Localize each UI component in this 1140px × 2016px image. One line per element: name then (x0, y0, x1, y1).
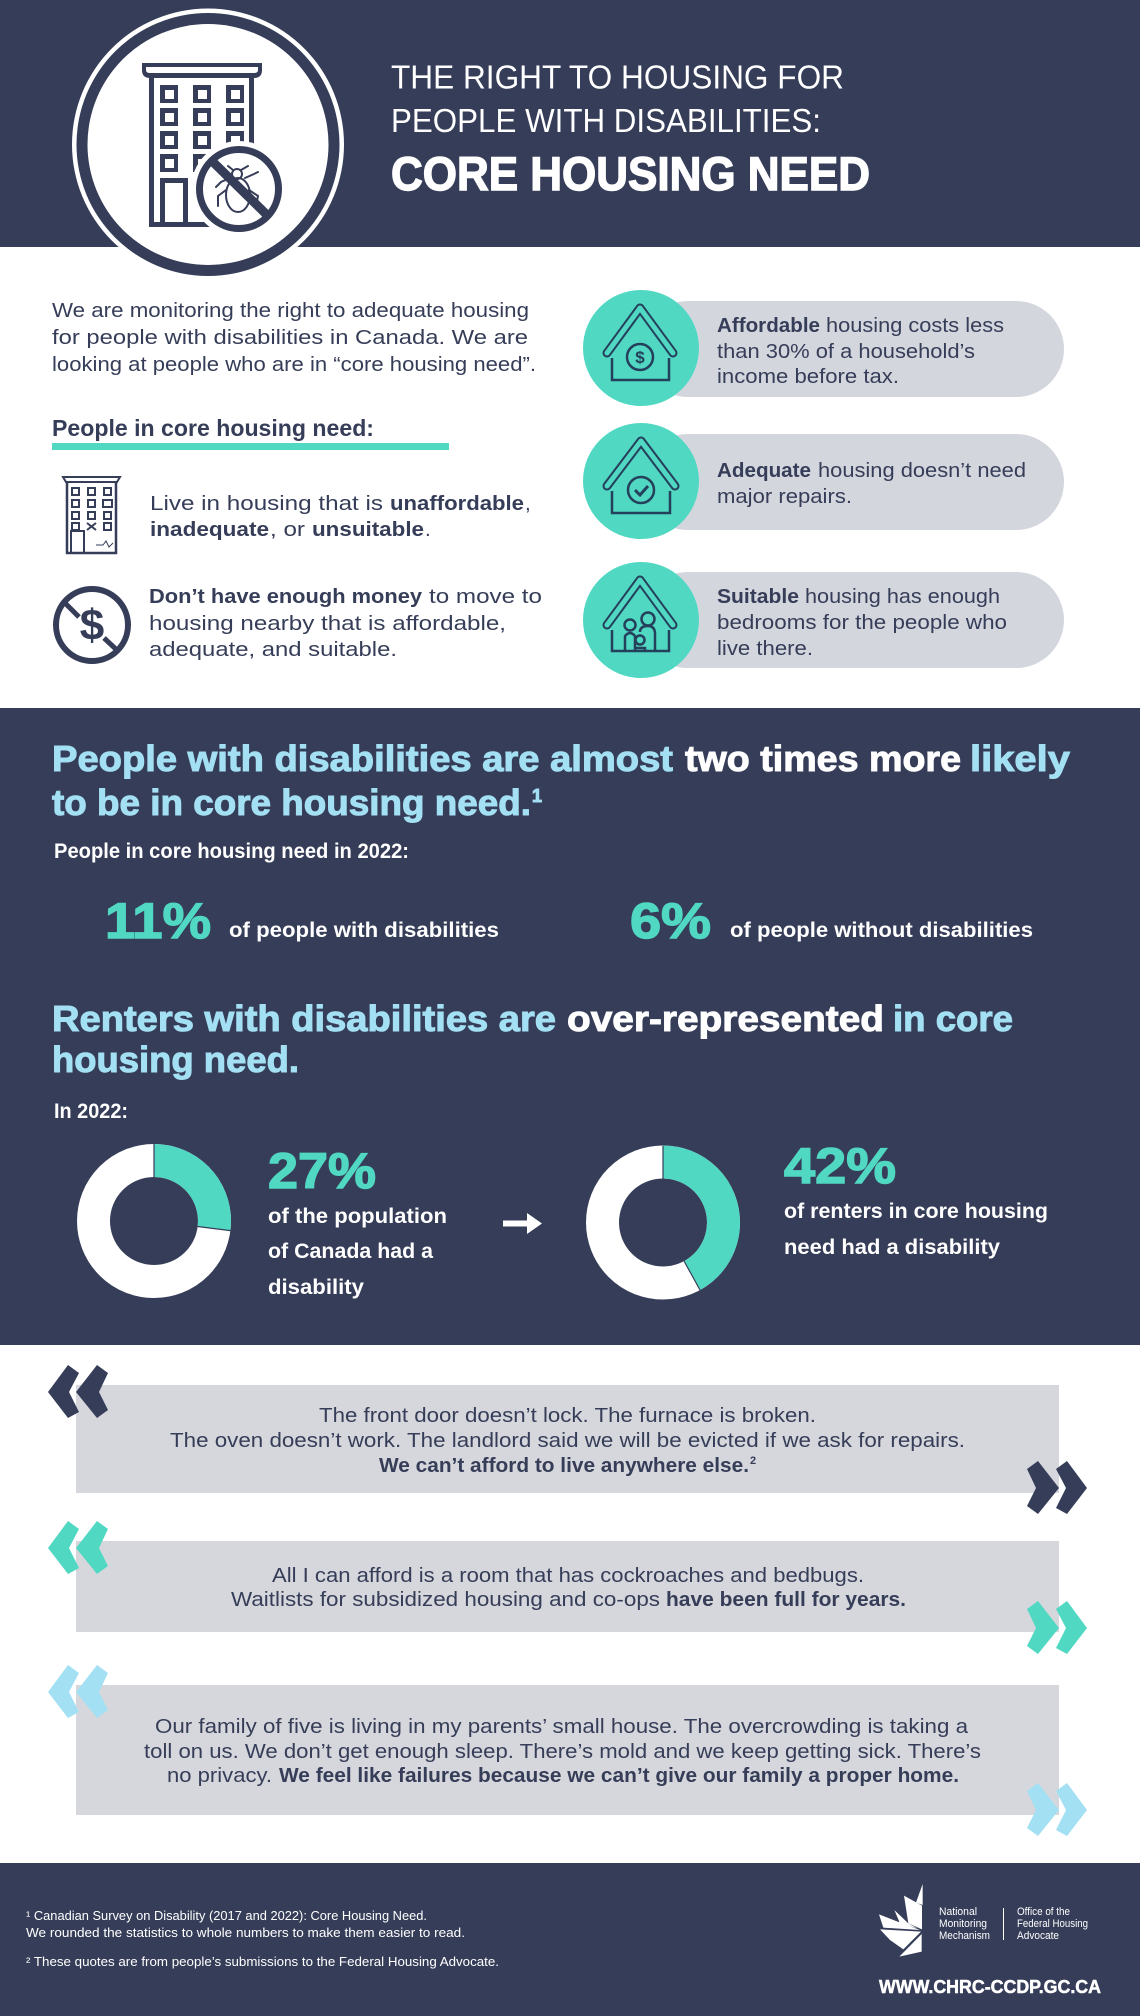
stat: 42 percent of renters: 42% (784, 1138, 896, 1194)
logo text: national monitoring mechanism (939, 1906, 990, 1942)
arrow (503, 1213, 542, 1234)
text: not enough money: housing nearby that is affordable, (149, 612, 506, 635)
logo text: national monitoring mechanism: Monitoring (939, 1918, 987, 1930)
text: suitable definition: live there. (717, 637, 813, 660)
logo text: office of the federal housing advocate (1017, 1906, 1088, 1942)
title: PEOPLE WITH DISABILITIES: (391, 102, 821, 139)
quote text (231, 1564, 906, 1611)
heading: two times more likely: two times more (685, 738, 961, 779)
icon: no money: $ (80, 601, 104, 650)
stat: 27 percent of population: of Canada had a (268, 1239, 434, 1263)
text: live in housing: . (425, 518, 431, 541)
text: not enough money (149, 585, 542, 661)
logo text: office of the federal housing advocate: Office of the (1017, 1906, 1070, 1918)
stat: 27 percent of population: of the population (268, 1204, 447, 1228)
quote text (144, 1715, 981, 1787)
text: live in housing: , (525, 492, 531, 515)
title: CORE HOUSING NEED (391, 147, 870, 200)
footnotes (26, 1909, 499, 1969)
text block: introduction: looking at people who are in “core housing need”. (52, 353, 536, 376)
stat: 11 percent: of people with disabilities (229, 918, 499, 942)
quote text: The front door doesn’t lock. The furnace is broken. (319, 1404, 816, 1427)
text: suitable definition: Suitable (717, 585, 799, 608)
icon: building with no-bugs badge (72, 8, 344, 280)
stat: 6 percent: 6% (630, 893, 711, 949)
icon: house with family (607, 580, 673, 651)
subheading: in 2022: In 2022: (54, 1099, 128, 1123)
text: affordable definition (717, 314, 1004, 388)
heading: people in core housing need: People in core housing need: (52, 415, 374, 441)
text: affordable definition: than 30% of a household’s (717, 340, 975, 363)
panel: quote three (48, 1665, 1087, 1836)
website url: WWW.CHRC-CCDP.GC.CA (879, 1977, 1101, 1997)
text: suitable definition: bedrooms for the people who (717, 611, 1007, 634)
text: live in housing: Live in housing that is (150, 492, 383, 515)
logo text: national monitoring mechanism: National (939, 1906, 977, 1918)
text: adequate definition: Adequate (717, 459, 811, 482)
footnotes: We rounded the statistics to whole numbers to make them easier to read. (26, 1926, 465, 1940)
text: affordable definition: Affordable (717, 314, 820, 337)
heading: two times more likely (52, 738, 1070, 823)
text: suitable definition (717, 585, 1007, 660)
heading: two times more likely: People with disabilities are almost (52, 738, 673, 779)
panel: affordable (583, 290, 1064, 406)
stat: 27 percent of population (268, 1143, 447, 1299)
quote text: Waitlists for subsidized housing and co-ops (231, 1588, 660, 1611)
stat: 6 percent (630, 893, 1033, 949)
text block: introduction (52, 299, 536, 376)
text: not enough money: to move to (429, 585, 542, 608)
text: not enough money: adequate, and suitable. (149, 638, 397, 661)
title (391, 58, 870, 200)
icon: closing quote mark (1027, 1601, 1087, 1654)
donut chart: 42 percent (602, 1146, 724, 1290)
text: affordable definition: income before tax. (717, 365, 899, 388)
panel: header (0, 0, 1140, 280)
panel: adequate (583, 423, 1064, 539)
quote text: All I can afford is a room that has cockroaches and bedbugs. (272, 1564, 864, 1587)
quote text: We feel like failures because we can’t give our family a proper home. (279, 1764, 959, 1787)
quote text: We can’t afford to live anywhere else. (379, 1454, 749, 1477)
stat: 6 percent: of people without disabilities (730, 918, 1033, 942)
footnotes: ¹ Canadian Survey on Disability (2017 and 2022): Core Housing Need. (26, 1909, 427, 1923)
icon: house with check (607, 441, 675, 513)
stat: 42 percent of renters: need had a disability (784, 1235, 1000, 1259)
heading: renters over-represented: Renters with disabilities are (52, 998, 556, 1039)
stat: 42 percent of renters (784, 1138, 1048, 1259)
text: suitable definition: housing has enough (805, 585, 1000, 608)
icon: closing quote mark (1027, 1461, 1087, 1514)
stat: 11 percent (105, 893, 499, 949)
subheading: 2022: People in core housing need in 2022: (54, 839, 409, 863)
text: live in housing: inadequate (150, 518, 269, 541)
heading: renters over-represented: in core (893, 998, 1013, 1039)
heading: renters over-represented: over-represented (567, 998, 884, 1039)
footnotes: ² These quotes are from people’s submissions to the Federal Housing Advocate. (26, 1955, 499, 1969)
text: live in housing: unaffordable (390, 492, 524, 515)
quote text: have been full for years. (666, 1588, 906, 1611)
heading: renters over-represented (52, 998, 1013, 1080)
icon: house with dollar (607, 308, 673, 380)
logo text: office of the federal housing advocate: Advocate (1017, 1930, 1059, 1942)
text: affordable definition: housing costs less (826, 314, 1004, 337)
quote text: Our family of five is living in my parents’ small house. The overcrowding is taking a (155, 1715, 969, 1738)
quote text: toll on us. We don’t get enough sleep. There’s mold and we keep getting sick. There’s (144, 1740, 981, 1763)
heading: two times more likely: 1 (532, 786, 542, 806)
text: adequate definition: major repairs. (717, 485, 852, 508)
quote text: 2 (750, 1455, 756, 1467)
donut chart: 27 percent (94, 1144, 230, 1282)
icon: house with dollar: $ (635, 348, 645, 367)
text block: introduction: We are monitoring the right to adequate housing (52, 299, 529, 322)
icon: opening quote mark (48, 1665, 108, 1718)
icon: damaged building (63, 477, 120, 553)
icon: closing quote mark (1027, 1783, 1087, 1836)
title: THE RIGHT TO HOUSING FOR (391, 58, 844, 96)
icon: maple leaf logo (879, 1884, 923, 1957)
quote text (170, 1404, 965, 1477)
panel: quote two (48, 1521, 1087, 1654)
panel: statistics (0, 708, 1140, 1345)
panel: quote one (48, 1365, 1087, 1514)
stat: 42 percent of renters: of renters in core housing (784, 1199, 1048, 1223)
logo text: office of the federal housing advocate: Federal Housing (1017, 1918, 1088, 1930)
text: live in housing: unsuitable (312, 518, 424, 541)
text: live in housing (150, 492, 531, 541)
heading: two times more likely: to be in core housing need. (52, 782, 531, 823)
stat: 27 percent of population: disability (268, 1275, 364, 1299)
logo text: national monitoring mechanism: Mechanism (939, 1930, 990, 1942)
heading: people in core housing need (52, 415, 449, 450)
icon: no money (56, 589, 128, 661)
text: not enough money: Don’t have enough money (149, 585, 423, 608)
heading: two times more likely: likely (970, 738, 1070, 779)
icon: opening quote mark (48, 1365, 108, 1418)
text: adequate definition (717, 459, 1026, 508)
stat: 11 percent: 11% (105, 893, 211, 949)
text: live in housing: , or (270, 518, 305, 541)
stat: 27 percent of population: 27% (268, 1143, 376, 1199)
heading: renters over-represented: housing need. (52, 1039, 299, 1080)
quote text: The oven doesn’t work. The landlord said we will be evicted if we ask for repairs. (170, 1429, 965, 1452)
text block: introduction: for people with disabilities in Canada. We are (52, 326, 528, 349)
panel: footer (0, 1863, 1140, 2016)
text: adequate definition: housing doesn’t need (818, 459, 1026, 482)
panel: suitable (583, 562, 1064, 678)
quote text: no privacy. (167, 1764, 272, 1787)
icon: opening quote mark (48, 1521, 108, 1574)
